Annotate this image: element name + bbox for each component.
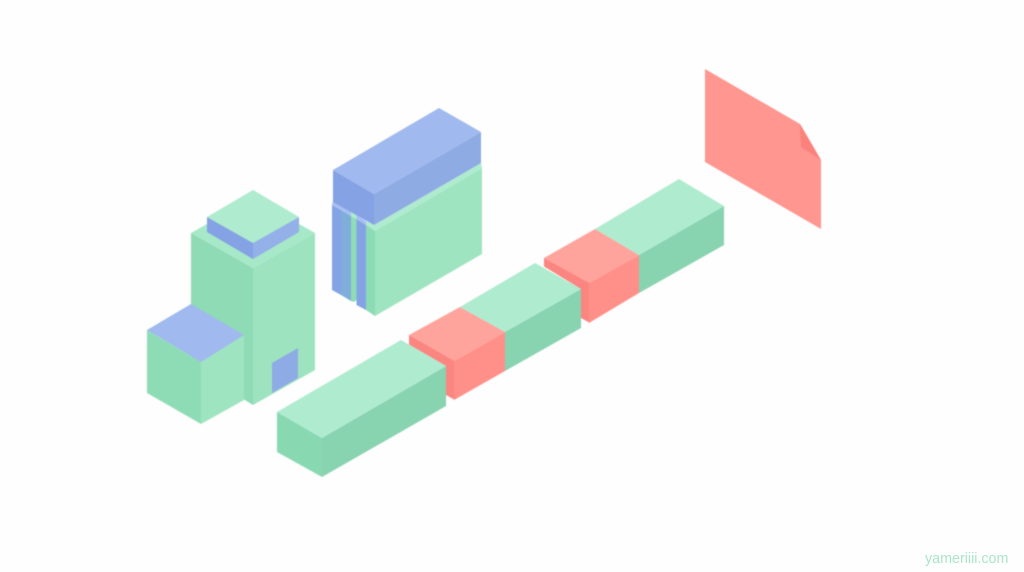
tower left face: [191, 233, 253, 405]
light green top strip middle: [351, 212, 356, 219]
green segment 1 top: [277, 340, 446, 438]
light blue top strip right: [356, 215, 366, 225]
red segment 2 top: [544, 229, 639, 283]
tower building: [191, 190, 315, 405]
tower roof: [191, 198, 315, 268]
narrow green stripe: [351, 216, 356, 302]
green segment 2 right face: [505, 289, 581, 371]
tower right face: [253, 233, 315, 405]
red segment 1 right face: [454, 332, 505, 400]
green segment 2 top: [460, 263, 581, 332]
slab building with blue block: [332, 108, 482, 316]
red segment 1 left side: [409, 335, 455, 400]
blue block left face: [333, 170, 374, 225]
green main face: [375, 168, 482, 316]
green segment 3 right face: [639, 206, 724, 293]
cube blue roof: [147, 304, 244, 362]
roof cap top: [207, 190, 299, 243]
watermark: yameriiii.com: [925, 551, 1008, 567]
blue block top: [333, 108, 481, 194]
third blue stripe: [356, 219, 366, 310]
folded corner: [800, 124, 821, 160]
green segment 3 top: [595, 179, 724, 255]
document sheet: [705, 69, 821, 229]
green segment 1 left face: [277, 412, 322, 477]
green segment 1 right face: [322, 366, 446, 477]
green top strip: [366, 163, 482, 231]
green narrow left face: [366, 225, 375, 316]
small cube building: [147, 304, 244, 424]
door: [272, 348, 298, 393]
segmented beam: [277, 179, 724, 477]
roof cap blue right side: [253, 217, 299, 259]
first blue stripe: [332, 205, 341, 295]
red segment 1 top: [409, 307, 505, 361]
roof cap blue left side: [207, 217, 253, 259]
cube right face: [201, 335, 244, 424]
second blue-teal stripe: [341, 210, 351, 301]
red segment 2 right face: [589, 255, 639, 323]
light blue top strip left: [332, 201, 351, 216]
blue block right face: [374, 132, 481, 225]
cube left face: [147, 330, 201, 424]
red segment 2 left side: [544, 258, 590, 323]
sheet body: [705, 69, 821, 229]
